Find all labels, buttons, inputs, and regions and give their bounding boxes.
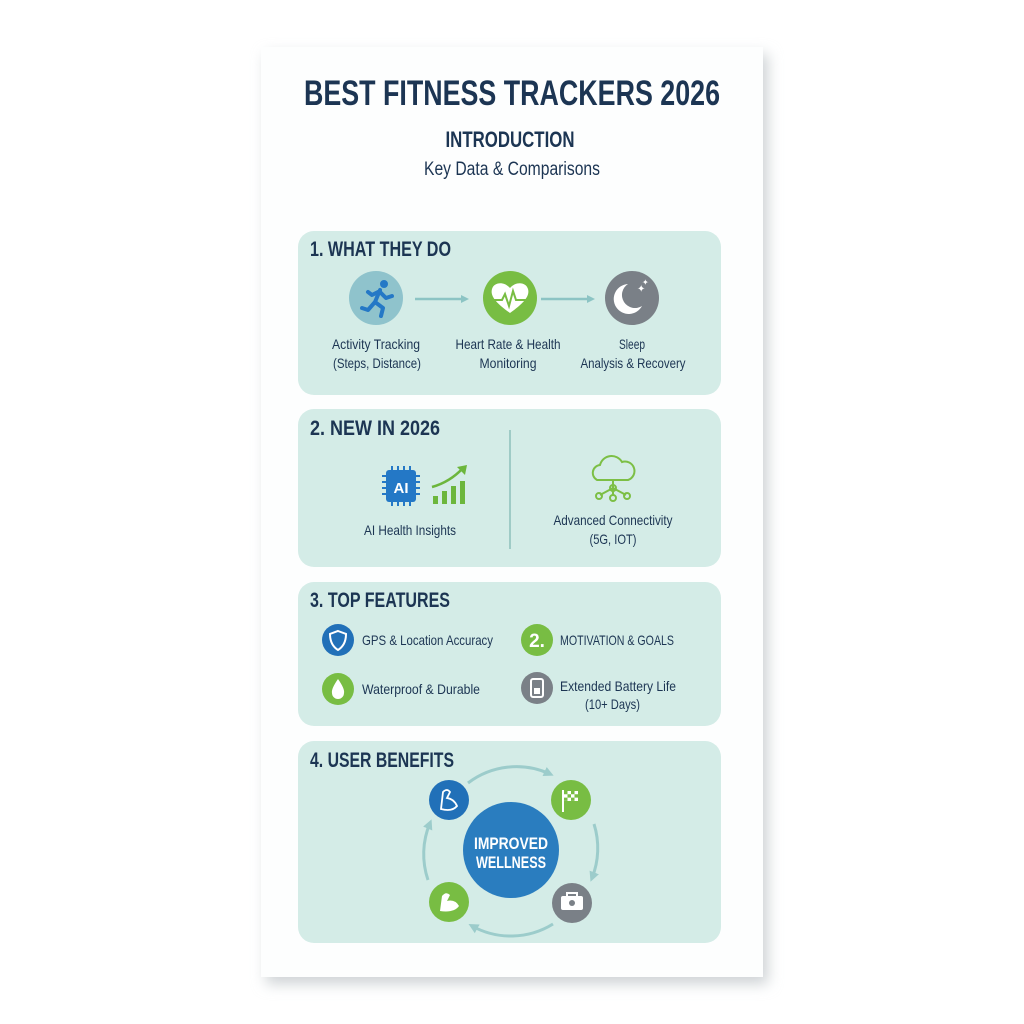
- label: sleep: Analysis & Recovery: [580, 355, 686, 371]
- icon: moon: [605, 271, 659, 325]
- feature: battery: (10+ Days): [585, 696, 640, 712]
- panel: user benefits: [298, 741, 721, 943]
- divider: [509, 430, 511, 549]
- label: AI health insights: AI Health Insights: [364, 522, 456, 538]
- icon: flexed arm: [429, 882, 469, 922]
- subtitle: key data: Key Data & Comparisons: [424, 159, 600, 180]
- panel: what they do: [298, 231, 721, 395]
- icon: toolkit: [552, 883, 592, 923]
- icon: moon: ✦: [637, 284, 645, 295]
- cycle arrows: [424, 767, 598, 936]
- label: heart rate: Monitoring: [480, 355, 536, 371]
- label: activity tracking: (Steps, Distance): [333, 355, 421, 371]
- feature: GPS: [322, 624, 493, 656]
- title: BEST FITNESS TRACKERS 2026: [304, 74, 720, 113]
- icon: cloud network: [593, 456, 634, 501]
- label: advanced connectivity: Advanced Connectivity: [554, 512, 672, 528]
- icon: AI chip with chart: AI: [394, 480, 408, 497]
- card background: [261, 47, 768, 984]
- panel: new in 2026: [298, 409, 721, 567]
- center: improved wellness: WELLNESS: [476, 853, 546, 872]
- icon: heart: [483, 271, 537, 325]
- label: heart rate: Heart Rate & Health: [456, 336, 560, 352]
- heading: what they do: 1. WHAT THEY DO: [310, 238, 451, 261]
- icon: moon: ✦: [642, 278, 649, 287]
- center: improved wellness: IMPROVED: [474, 834, 548, 853]
- arrow: [415, 298, 466, 300]
- feature: GPS: GPS & Location Accuracy: [362, 632, 493, 648]
- icon: AI chip with chart: [382, 465, 467, 506]
- feature: motivation: MOTIVATION & GOALS: [560, 632, 674, 648]
- icon: flag: [551, 780, 591, 820]
- label: activity tracking: Activity Tracking: [332, 336, 420, 352]
- panel: top features: [298, 582, 721, 726]
- subtitle: introduction: INTRODUCTION: [446, 127, 574, 152]
- center: improved wellness: [463, 802, 559, 898]
- feature: battery: [521, 672, 676, 712]
- feature: battery: Extended Battery Life: [560, 678, 676, 694]
- feature: waterproof: Waterproof & Durable: [362, 681, 480, 697]
- icon: arm: [429, 780, 469, 820]
- heading: new in 2026: 2. NEW IN 2026: [310, 417, 440, 440]
- label: advanced connectivity: (5G, IOT): [590, 531, 636, 547]
- arrow: [541, 298, 592, 300]
- label: sleep: Sleep: [619, 336, 645, 352]
- heading: top features: 3. TOP FEATURES: [310, 589, 450, 612]
- icon: runner: [349, 271, 403, 325]
- feature: motivation: [521, 624, 674, 656]
- heading: user benefits: 4. USER BENEFITS: [310, 749, 454, 772]
- feature: waterproof: [322, 673, 480, 705]
- feature: motivation: 2.: [529, 631, 545, 652]
